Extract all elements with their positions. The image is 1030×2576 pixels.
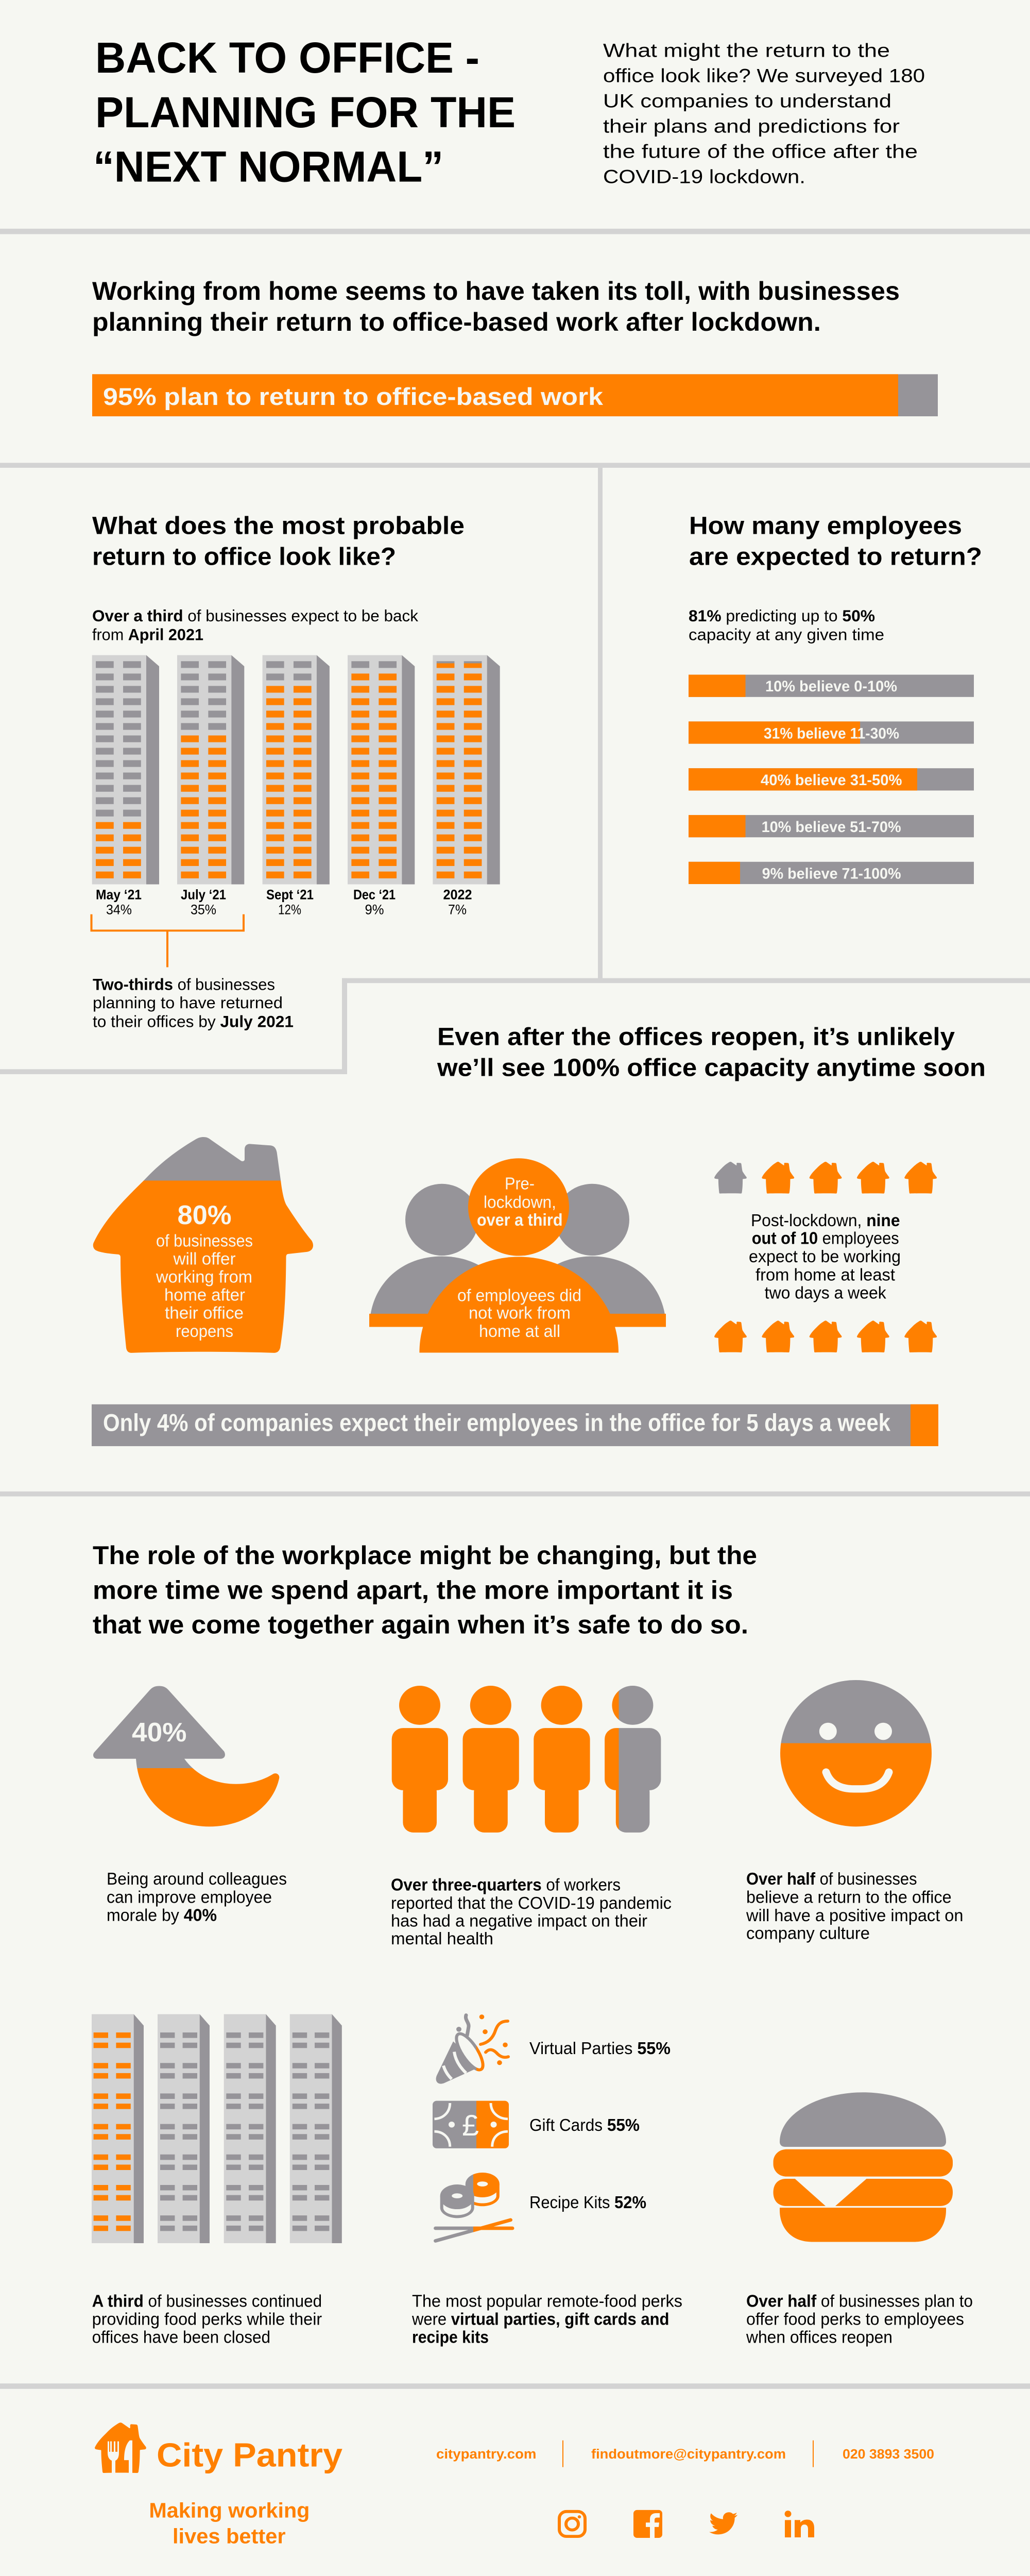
title: “NEXT NORMAL” <box>93 143 443 191</box>
text: post-lockdown: two days a week <box>765 1283 886 1302</box>
text: over half culture: company culture <box>746 1924 870 1943</box>
building labels: Sept ‘21 <box>266 887 314 902</box>
text: two-thirds <box>93 975 294 1031</box>
bar chart: capacity expected <box>689 675 974 884</box>
heading: most probable return <box>92 513 465 570</box>
label: recipe kits: Recipe Kits 52% <box>529 2193 646 2212</box>
intro paragraph: COVID-19 lockdown. <box>603 166 805 188</box>
heading: even after offices reopen: Even after the offices reopen, it’s unlikely <box>437 1024 955 1051</box>
bar: 0-10% <box>689 675 974 697</box>
tagline: lives better <box>173 2524 286 2548</box>
text: being around colleagues: morale by 40% <box>107 1906 217 1925</box>
bar: 51-70%: 10% believe 51-70% <box>762 819 901 836</box>
building labels: 7% <box>448 902 467 917</box>
text: post-lockdown <box>749 1211 901 1302</box>
intro paragraph: the future of the office after the <box>603 141 918 162</box>
icon: morale arrow 40% <box>93 1686 279 1826</box>
tagline <box>149 2499 310 2548</box>
icon: sushi and chopsticks <box>436 2173 512 2241</box>
bar: 11-30% <box>689 721 974 744</box>
building: orange windows <box>92 2014 144 2243</box>
contact details: citypantry.com <box>436 2446 536 2462</box>
building: July 21 <box>177 655 244 884</box>
building: Sept 21 <box>263 655 330 884</box>
text: a third of businesses: A third of businesses continued <box>92 2292 322 2311</box>
text: post-lockdown: out of 10 employees <box>752 1229 899 1248</box>
bar: 31-50%: 40% believe 31-50% <box>761 771 902 789</box>
text: post-lockdown: expect to be working <box>749 1247 901 1266</box>
building labels: May ‘21 <box>96 887 142 902</box>
icon: three people: lockdown, <box>484 1193 556 1212</box>
building labels: July ‘21 <box>181 887 226 902</box>
bar: 71-100% <box>689 862 974 884</box>
icon: burger <box>774 2092 953 2242</box>
intro paragraph: office look like? We surveyed 180 <box>603 65 925 87</box>
text: remote food perks: The most popular remote-food perks <box>412 2292 682 2311</box>
label: virtual parties: Virtual Parties 55% <box>529 2039 671 2058</box>
bar: 0-10%: 10% believe 0-10% <box>765 678 897 695</box>
intro paragraph: UK companies to understand <box>603 90 891 112</box>
contact details: findoutmore@citypantry.com <box>591 2446 786 2462</box>
text: a third of businesses <box>92 2292 322 2347</box>
text: post-lockdown: Post-lockdown, nine <box>751 1211 900 1230</box>
building labels: Dec ‘21 <box>353 887 396 902</box>
intro paragraph: What might the return to the <box>603 40 890 61</box>
heading: working from home: planning their return to office-based work after lockdown. <box>92 308 821 336</box>
icon: big house 80% <box>93 1137 313 1353</box>
icon: big house 80%: of businesses <box>156 1231 253 1250</box>
icon: gift card: £ <box>462 2109 479 2142</box>
icon: linkedin <box>785 2511 814 2537</box>
icon: four people <box>392 1686 661 1833</box>
icon: three people: Pre- <box>505 1174 535 1193</box>
text: remote food perks: were virtual parties, gift cards and <box>411 2310 670 2329</box>
text: over half culture: Over half of businesses <box>746 1869 917 1889</box>
logo: City Pantry: City Pantry <box>157 2437 342 2474</box>
text: post-lockdown: from home at least <box>756 1265 895 1284</box>
text: remote food perks <box>411 2292 682 2347</box>
text: over a third: from April 2021 <box>92 625 203 643</box>
logo: City Pantry <box>95 2422 342 2474</box>
icon: smiley face <box>780 1680 932 1826</box>
building labels: 2022 <box>443 887 472 902</box>
heading: how many employees: How many employees <box>689 513 962 539</box>
text: a third of businesses: providing food perks while their <box>92 2310 322 2329</box>
bar: 95% plan to return <box>92 374 938 416</box>
building: grey windows 1 <box>158 2014 210 2243</box>
contact details: 020 3893 3500 <box>843 2446 934 2462</box>
text: being around colleagues: Being around colleagues <box>107 1869 287 1889</box>
bar: 51-70% <box>689 815 974 837</box>
text: over three-quarters: Over three-quarters of workers <box>391 1875 621 1894</box>
icon: gift card <box>433 2101 509 2148</box>
text: over half culture: believe a return to the office <box>746 1888 952 1907</box>
heading: how many employees <box>689 513 982 570</box>
chart: office buildings timeline <box>92 655 500 884</box>
bar: 31-50% <box>689 768 974 790</box>
building: Dec 21 <box>348 655 415 884</box>
text: over half food perks: Over half of businesses plan to <box>746 2292 973 2311</box>
heading: role of the workplace <box>93 1541 757 1639</box>
text: over three-quarters: reported that the COVID-19 pandemic <box>391 1893 672 1913</box>
text: over half food perks: offer food perks to employees <box>746 2310 964 2329</box>
icon: three people <box>369 1158 666 1352</box>
heading: how many employees: are expected to return? <box>689 543 982 570</box>
heading: most probable return: return to office look like? <box>92 543 396 570</box>
icon: morale arrow 40%: 40% <box>132 1718 187 1748</box>
icons: top row of small houses <box>714 1162 937 1194</box>
building: grey windows 2 <box>224 2014 276 2243</box>
contact details <box>436 2441 934 2467</box>
building labels: 34% <box>106 902 132 917</box>
text: 81% predicting <box>689 606 884 643</box>
intro paragraph: their plans and predictions for <box>603 115 900 137</box>
building labels <box>96 887 472 917</box>
heading: even after offices reopen <box>437 1024 986 1081</box>
icon: party popper <box>436 2014 508 2084</box>
icon: big house 80%: 80% <box>177 1200 231 1230</box>
heading: even after offices reopen: we’ll see 100% office capacity anytime soon <box>437 1054 986 1081</box>
building: 2022 <box>433 655 500 884</box>
bar: 95% plan to return: 95% plan to return to office-based work <box>103 384 603 411</box>
heading: role of the workplace: that we come together again when it’s safe to do so. <box>93 1611 748 1639</box>
text: remote food perks: recipe kits <box>412 2328 489 2347</box>
text: over three-quarters: mental health <box>391 1929 493 1948</box>
icon: big house 80%: home after <box>164 1285 245 1304</box>
heading: most probable return: What does the most probable <box>92 513 465 539</box>
icon: three people: home at all <box>479 1322 560 1341</box>
text: a third of businesses: offices have been closed <box>92 2328 270 2347</box>
title: BACK TO OFFICE - <box>95 34 479 82</box>
text: over a third: Over a third of businesses expect to be back <box>92 606 419 625</box>
text: over half food perks: when offices reopen <box>746 2328 892 2347</box>
icon: big house 80%: working from <box>156 1267 252 1286</box>
label: gift cards: Gift Cards 55% <box>529 2116 640 2135</box>
building: May 21 <box>92 655 159 884</box>
bracket: two-thirds <box>92 914 244 967</box>
icon: instagram <box>559 2512 585 2536</box>
text: over half culture <box>746 1869 964 1943</box>
building: grey windows 3 <box>290 2014 342 2243</box>
bar: only 4% <box>92 1404 938 1446</box>
icons: bottom row of small houses <box>714 1320 937 1352</box>
title: PLANNING FOR THE <box>95 88 516 137</box>
tagline: Making working <box>149 2499 310 2522</box>
heading: role of the workplace: more time we spend apart, the more important it is <box>93 1575 733 1604</box>
building labels: 9% <box>365 902 384 917</box>
text: two-thirds: planning to have returned <box>93 994 283 1012</box>
text: over three-quarters <box>391 1875 672 1948</box>
icon: facebook <box>633 2510 662 2538</box>
icon: three people: over a third <box>477 1211 562 1230</box>
building labels: 12% <box>278 902 301 917</box>
heading: working from home: Working from home seems to have taken its toll, with businesses <box>92 277 900 306</box>
text: over half culture: will have a positive impact on <box>746 1906 964 1925</box>
bar: 71-100%: 9% believe 71-100% <box>762 865 901 882</box>
icon: twitter <box>709 2512 737 2534</box>
heading: working from home <box>92 277 900 336</box>
heading: role of the workplace: The role of the workplace might be changing, but the <box>93 1541 757 1570</box>
text: two-thirds: Two-thirds of businesses <box>93 975 275 993</box>
text: two-thirds: to their offices by July 2021 <box>93 1012 294 1031</box>
text: being around colleagues: can improve employee <box>107 1888 272 1907</box>
bar: only 4%: Only 4% of companies expect their employees in the office for 5 days a week <box>103 1410 890 1436</box>
icon: big house 80%: their office <box>165 1303 244 1323</box>
text: being around colleagues <box>107 1869 287 1925</box>
text: 81% predicting: capacity at any given time <box>689 625 884 643</box>
building labels: 35% <box>191 902 216 917</box>
text: over a third <box>92 606 419 643</box>
bar: 11-30%: 31% believe 11-30% <box>764 725 899 742</box>
text: over three-quarters: has had a negative impact on their <box>391 1911 647 1930</box>
text: over half food perks <box>746 2292 973 2347</box>
icon: three people: not work from <box>469 1303 571 1323</box>
icon: three people: of employees did <box>457 1286 581 1305</box>
icon: big house 80%: will offer <box>173 1249 236 1268</box>
chart: four office buildings <box>92 2014 342 2243</box>
intro paragraph <box>603 40 925 188</box>
text: 81% predicting: 81% predicting up to 50% <box>689 606 875 625</box>
title <box>93 34 516 191</box>
icon: big house 80%: reopens <box>176 1322 233 1341</box>
